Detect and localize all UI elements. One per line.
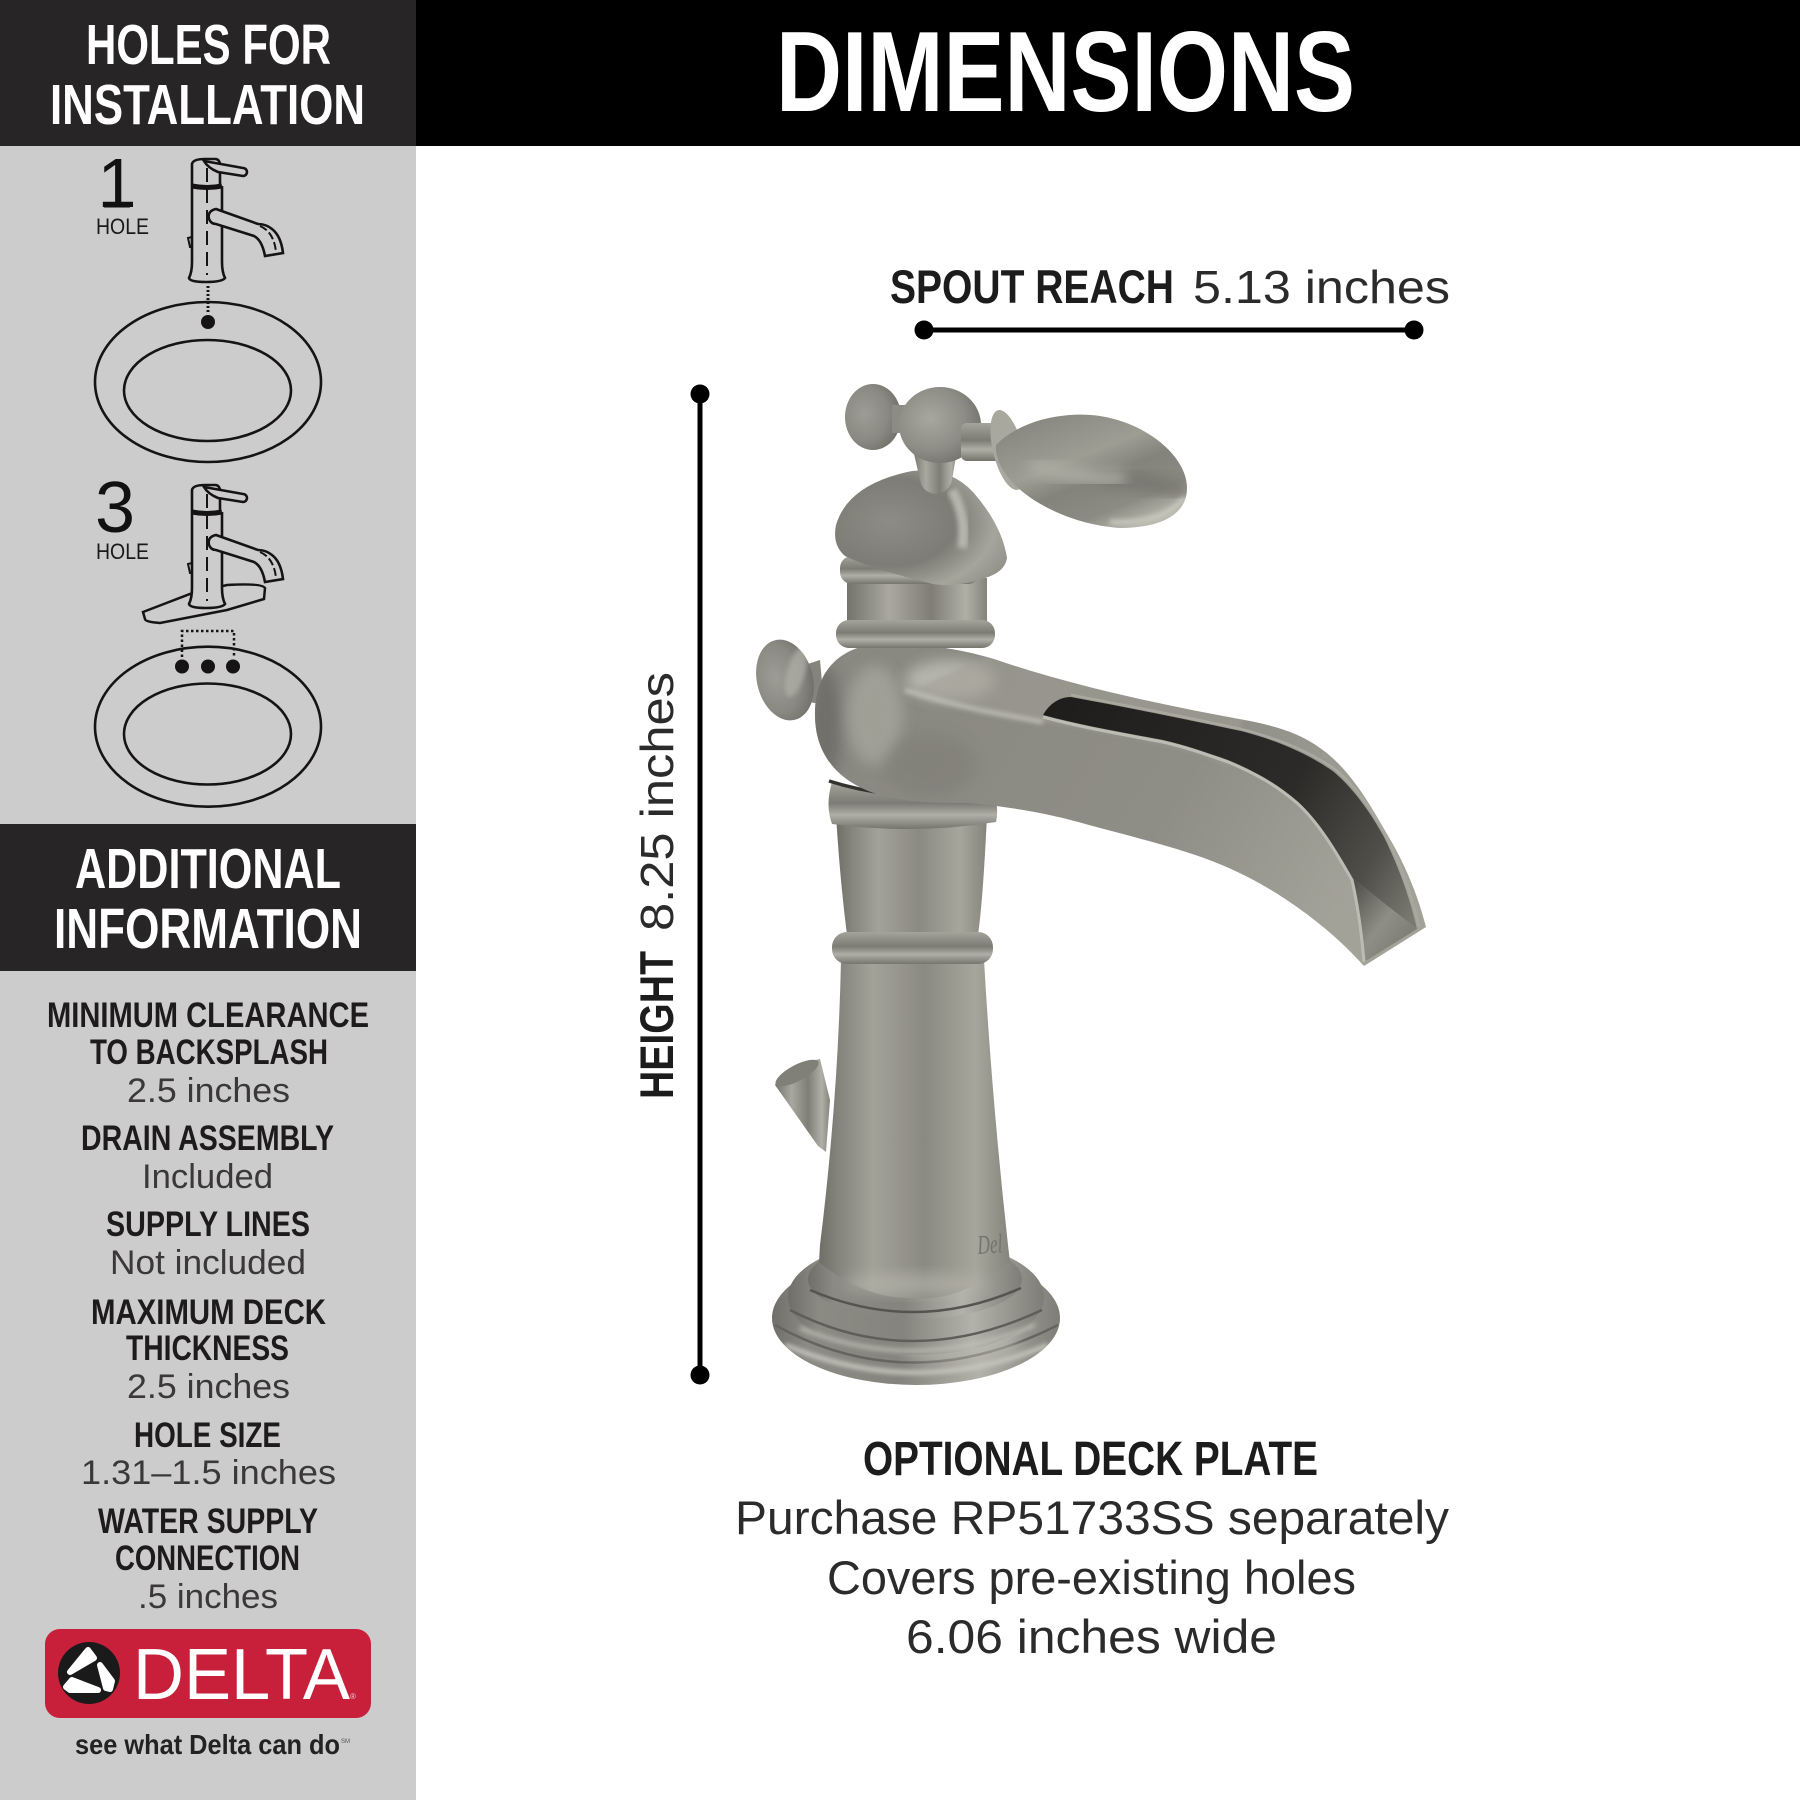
dimension: spout reach: 5.13 inches [1193,261,1450,313]
dimension: height [630,384,710,1384]
text block: additional information list: MINIMUM CLEARANCE [47,996,369,1035]
dome cap [835,470,1007,585]
icon: one hole installation [95,144,321,462]
text block: additional information list: 1.31–1.5 inches [81,1454,336,1492]
handle [845,384,1187,528]
neck [836,556,995,648]
logo: delta: DELTA [133,1635,350,1715]
icon: one hole installation: 1 [98,144,136,222]
icon: three hole installation: 3 [95,468,135,548]
heading bar: dimensions [416,0,1800,146]
heading bar: dimensions: DIMENSIONS [776,9,1355,136]
heading: holes for installation: HOLES FOR [86,13,331,77]
dimension: spout reach: SPOUT REACH [890,260,1174,313]
text block: additional information list: CONNECTION [115,1539,300,1578]
text block: additional information list: HOLE SIZE [134,1416,281,1455]
dimension: height: 8.25 inches [631,672,683,931]
lever [996,415,1187,528]
spout dark opening [1043,697,1417,929]
text block: additional information list: WATER SUPPLY [98,1502,318,1541]
dimension: height: HEIGHT [630,951,683,1099]
text block: additional information list: Not included [110,1244,306,1282]
hub shading [815,665,844,772]
logo: delta: ® [350,1692,356,1701]
text block: additional information list: Included [142,1158,273,1196]
text block: optional deck plate: Purchase RP51733SS separately [735,1491,1449,1544]
logo: delta: SM [341,1739,350,1745]
foot base [772,1258,1060,1385]
text block: additional information list [47,996,369,1616]
text block: additional information list: TO BACKSPLASH [90,1033,328,1072]
text block: additional information list: DRAIN ASSEMBLY [81,1119,334,1158]
dimension: spout reach [890,260,1450,340]
pop-up drain lever [772,1055,830,1152]
heading: holes for installation: INSTALLATION [50,73,365,137]
side knob [756,640,822,720]
spout top face [925,657,1241,740]
spout with hub [809,643,1426,966]
panel: left sidebar [0,0,416,1800]
text block: optional deck plate [735,1433,1449,1663]
text block: additional information list: SUPPLY LINES [106,1205,310,1244]
heading: additional information [0,824,416,971]
icon: three hole installation: HOLE [96,539,149,564]
text block: additional information list: 2.5 inches [127,1368,290,1406]
text block: additional information list: MAXIMUM DECK [91,1293,326,1332]
logo: delta: see what Delta can do [75,1729,340,1760]
icon: three hole installation [95,468,321,807]
heading: additional information: ADDITIONAL [75,837,341,901]
text block: optional deck plate: 6.06 inches wide [906,1610,1277,1663]
text block: optional deck plate: Covers pre-existing holes [827,1551,1356,1604]
upper body and ring [828,781,997,964]
heading: holes for installation [0,0,416,146]
icon: one hole installation: HOLE [96,214,149,239]
logo: delta [45,1629,371,1760]
spout tip [1352,878,1417,962]
text block: additional information list: 2.5 inches [127,1072,290,1110]
product photo: waterfall faucet [748,384,1426,1385]
lower body cone [819,960,1010,1298]
text block: optional deck plate: OPTIONAL DECK PLATE [863,1433,1318,1486]
heading: additional information: INFORMATION [54,897,362,961]
text block: additional information list: THICKNESS [126,1329,289,1368]
text block: additional information list: .5 inches [138,1578,278,1616]
lower body cone: Del [976,1228,1003,1260]
